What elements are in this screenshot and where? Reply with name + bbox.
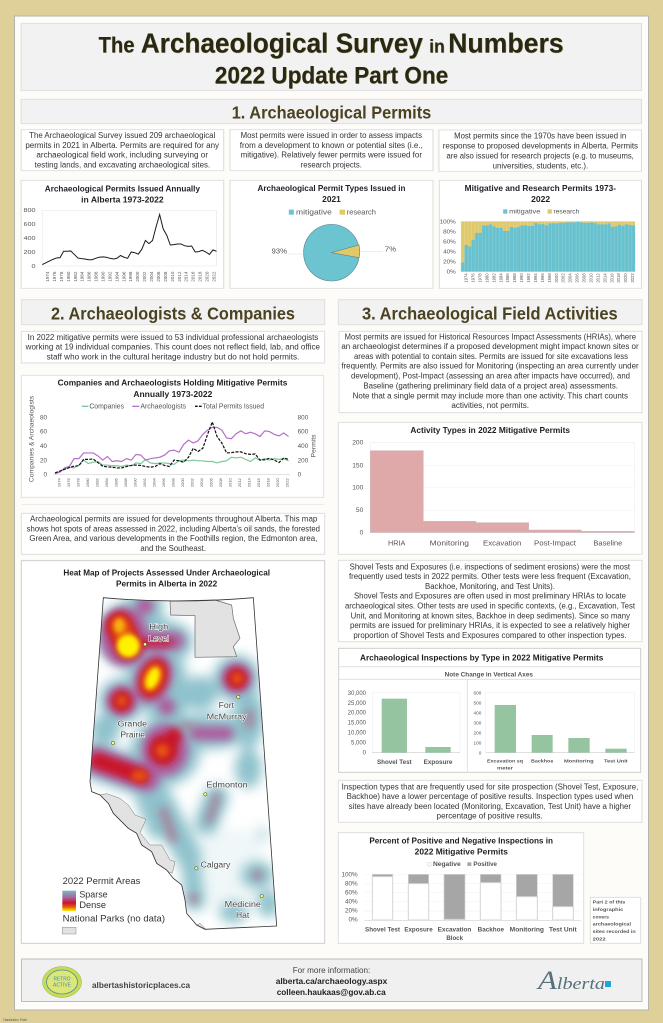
text block: inspection types: Inspection types that are frequently used for site prospection (Shovel Test, Exposure,: [342, 782, 638, 791]
stacked bar chart: positive and negative: Monitoring: [510, 927, 544, 934]
bar chart: activity types: 100: [352, 485, 364, 492]
Jasper and Banff National Parks: [100, 794, 175, 873]
line chart: permits issued annually: 1978: [59, 271, 64, 282]
city markers and labels: High: [149, 622, 169, 632]
line chart: permits issued annually: 1994: [114, 271, 119, 282]
line chart: permits issued annually: 1974: [45, 271, 50, 282]
pie chart: permit types: [230, 180, 433, 288]
title block: [21, 23, 641, 91]
bar chart: activity types: 50: [356, 507, 364, 514]
note: part 2: covers: [593, 914, 609, 920]
stacked bar chart: positive and negative: 80%: [345, 880, 358, 887]
line chart: permits issued annually: 800: [24, 208, 36, 214]
line chart: permits issued annually: 2008: [163, 271, 168, 282]
bar chart: shovel test and exposure: Exposure: [424, 760, 453, 766]
stacked bar chart: positive and negative: Exposure: [404, 927, 433, 934]
stacked bar chart: mitigative and research: 1992: [526, 273, 531, 283]
bar chart: shovel test and exposure: 30,000: [348, 691, 367, 697]
city markers and labels: Fort: [219, 700, 235, 710]
text block: shovel tests and exposures: Shovel Tests and Exposures are often used in most preliminary HRIAs to locate: [354, 592, 627, 601]
stacked bar chart: positive and negative: 60%: [345, 889, 358, 896]
stacked bar chart: mitigative and research: 1976: [470, 273, 476, 283]
stacked bar chart: mitigative and research: 2022: [531, 195, 551, 205]
icon: RetroActive logo: [42, 966, 82, 998]
stacked bar chart: mitigative and research: 2014: [602, 273, 607, 283]
note: part 2: [590, 897, 641, 943]
line chart: permits issued annually: 2012: [177, 271, 182, 282]
stacked bar chart: mitigative and research: 1990: [519, 273, 524, 283]
Alberta outline: [90, 598, 277, 929]
text block: permit purposes: mitigative). Relatively fewer permits were issued for: [241, 151, 422, 160]
stacked bar chart: mitigative and research: 60%: [443, 240, 456, 245]
line chart: companies and archaeologists: Companies: [89, 403, 124, 410]
text block: shovel tests and exposures: proportion of Shovel Tests and Exposures compared to other inspection types.: [353, 631, 627, 640]
line chart: companies and archaeologists: 0: [298, 472, 302, 479]
stacked bar chart: mitigative and research: 2018: [616, 273, 621, 283]
pie chart: permit types: Archaeological Permit Types Issued in: [258, 184, 405, 194]
stacked bar chart: positive and negative: 40%: [345, 899, 358, 906]
bar chart: shovel test and exposure: Shovel Test: [377, 760, 412, 766]
pie chart: permit types: mitigative: [296, 207, 332, 216]
stacked bar chart: mitigative and research: [439, 180, 641, 288]
section 3 area: field activities: [338, 300, 642, 554]
stacked bar chart: mitigative and research: 1998: [547, 273, 552, 283]
note: part 2: Part 2 of this: [593, 900, 626, 906]
line chart: permits issued annually: [21, 180, 224, 288]
bar chart: shovel test and exposure: 25,000: [348, 701, 367, 707]
line chart: permits issued annually: 1990: [100, 271, 106, 282]
city markers and labels: Edmonton: [206, 779, 248, 789]
line chart: companies and archaeologists: 0: [43, 472, 47, 479]
line chart: companies and archaeologists: 2006: [209, 477, 214, 487]
contact text: colleen.haukaas@gov.ab.ca: [277, 987, 386, 997]
text block: HRIA explanation: development), Post-Impact (assessing an area after impacts have occurred), and: [351, 372, 630, 381]
line chart: companies and archaeologists: 1984: [104, 477, 109, 487]
panel: inspections by type: Archaeological Inspections by Type in 2022 Mitigative Permits: [360, 653, 604, 663]
heat layers clipped to Alberta: [90, 587, 280, 923]
title line two: 2022 Update Part One: [215, 61, 448, 89]
stacked bar chart: mitigative and research: 100%: [440, 220, 456, 225]
line chart: companies and archaeologists: 1976: [66, 477, 71, 487]
classification note: Classification: Public: [3, 1018, 27, 1022]
line chart: permits issued annually: 1982: [73, 271, 78, 282]
text block: permits since 1970s: [439, 130, 641, 171]
stacked bar chart: positive and negative: 20%: [345, 908, 358, 915]
line chart: permits issued annually: 2002: [142, 271, 147, 282]
city markers and labels: Hat: [236, 910, 250, 920]
section 2 area: archaeologists and companies: [21, 300, 325, 554]
stacked bar chart: mitigative and research: 1974: [464, 273, 469, 283]
stacked bar chart: mitigative and research: 2022: [630, 273, 635, 283]
line chart: permits issued annually: Archaeological Permits Issued Annually: [45, 184, 200, 194]
bar chart: activity types: Post-Impact: [534, 540, 576, 547]
line chart: permits issued annually: 1988: [94, 271, 99, 282]
line chart: companies and archaeologists: Annually 1973-2022: [133, 389, 213, 399]
Wood Buffalo National Park: [170, 600, 240, 657]
text block: shovel tests and exposures: frequently used tests in 2022 permits. Other tests were less frequent (Excavation,: [349, 572, 631, 581]
text block: archaeologist counts: working at 19 individual companies. This count does not reflect field, lab, and office: [25, 342, 320, 352]
line chart: permits issued annually: 200: [24, 250, 36, 256]
bar chart: activity types: Monitoring: [430, 540, 469, 547]
bar chart: activity types: [338, 422, 642, 554]
map legend: [62, 876, 165, 934]
stacked bar chart: mitigative and research: 1984: [498, 273, 503, 283]
pie chart: permit types: 93%: [271, 247, 288, 255]
map title: Heat Map of Projects Assessed Under Archaeological: [63, 568, 270, 578]
line chart: companies and archaeologists: 1978: [76, 477, 81, 487]
line chart: permits issued annually: 2004: [149, 271, 154, 282]
text block: HRIA explanation: Baseline (gathering preliminary field data of a project area) assessments.: [363, 381, 618, 390]
line chart: companies and archaeologists: Total Permits Issued: [203, 403, 264, 410]
bar chart: activity types: HRIA: [388, 540, 406, 547]
bar chart: shovel test and exposure: 15,000: [348, 721, 367, 727]
bar chart: excavation, backhoe, monitoring, test unit: Test Unit: [604, 758, 628, 764]
line chart: permits issued annually: 600: [24, 222, 36, 228]
map legend: 2022 Permit Areas: [63, 876, 141, 886]
line chart: companies and archaeologists: [21, 375, 324, 497]
heading: 1. Archaeological Permits: [21, 99, 641, 124]
stacked bar chart: mitigative and research: 0%: [447, 270, 456, 275]
stacked bar chart: positive and negative: Shovel Test: [365, 927, 401, 934]
line chart: companies and archaeologists: 1986: [114, 477, 119, 487]
text block: HRIA explanation: frequently. Permits are also issued for Monitoring (inspecting an area currently under: [341, 362, 639, 371]
bar chart: excavation, backhoe, monitoring, test unit: 500: [474, 700, 482, 705]
bar chart: shovel test and exposure: [348, 691, 460, 766]
stacked bar chart: positive and negative: Percent of Positive and Negative Inspections in: [369, 835, 553, 845]
bar chart: excavation, backhoe, monitoring, test unit: Monitoring: [564, 758, 594, 764]
text block: HRIA explanation: Note that a single permit may include more than one activity. This chart counts: [353, 391, 628, 400]
text block: map description: and the Southeast.: [140, 543, 206, 553]
pie chart: permit types: research: [347, 207, 376, 216]
contact text: [276, 965, 388, 997]
panel: inspections by type: [339, 648, 641, 772]
line chart: permits issued annually: 1976: [52, 271, 57, 282]
text block: map description: [21, 513, 325, 554]
line chart: companies and archaeologists: 2002: [190, 477, 195, 487]
stacked bar chart: positive and negative: Negative: [433, 862, 461, 868]
text block: HRIA explanation: areas with potential to contain sites. Permits are issued for site excavations less: [354, 352, 628, 361]
line chart: companies and archaeologists: 1994: [152, 477, 157, 487]
line chart: companies and archaeologists: 2014: [247, 477, 252, 487]
line chart: companies and archaeologists: 2000: [180, 477, 185, 487]
line chart: permits issued annually: 0: [32, 264, 36, 270]
line chart: permits issued annually: 1992: [107, 271, 112, 282]
Waterton Lakes National Park: [197, 923, 206, 929]
heading: 3. Archaeological Field Activities: 3. Archaeological Field Activities: [362, 303, 618, 323]
stacked bar chart: mitigative and research: 1986: [505, 273, 510, 283]
text block: permits summary: testing lands, and excavating archaeological sites.: [35, 161, 210, 170]
line chart: companies and archaeologists: 1992: [142, 477, 147, 487]
text block: map description: Archaeological permits are issued for developments throughout Alberta. This map: [30, 513, 318, 523]
pie chart: permit types: 7%: [385, 244, 397, 253]
stacked bar chart: positive and negative: Backhoe: [478, 927, 504, 934]
line chart: companies and archaeologists: Companies and Archaeologists Holding Mitigative Permits: [58, 378, 287, 388]
line chart: permits issued annually: 2006: [156, 271, 161, 282]
text block: shovel tests and exposures: archaeological sites. Other tests are used in specific contexts, (e.g., Excavation, Test: [345, 602, 636, 611]
bar chart: activity types: Activity Types in 2022 Mitigative Permits: [410, 425, 570, 435]
text block: permits summary: [21, 130, 224, 171]
stacked bar chart: mitigative and research: research: [553, 208, 579, 215]
line chart: companies and archaeologists: 40: [40, 443, 47, 450]
text block: HRIA explanation: [339, 331, 642, 413]
stacked bar chart: mitigative and research: 2012: [595, 273, 600, 283]
stacked bar chart: positive and negative: 2022 Mitigative Permits: [415, 847, 508, 857]
line chart: permits issued annually: 2014: [184, 271, 189, 282]
text block: permits summary: archaeological field work, including surveying or: [36, 151, 208, 160]
line chart: companies and archaeologists: 600: [298, 429, 309, 436]
contact text: alberta.ca/archaeology.aspx: [276, 976, 388, 986]
text block: archaeologist counts: In 2022 mitigative permits were issued to 53 individual professional archaeologists: [28, 332, 318, 342]
stacked bar chart: positive and negative: Excavation: [438, 927, 471, 934]
text block: inspection types: Backhoe) have a lower percentage of positive results. Inspection types used when: [347, 792, 633, 801]
contact text: For more information:: [293, 965, 370, 975]
line chart: companies and archaeologists: 1990: [133, 477, 138, 487]
icon: RetroActive logo: RETRO: [54, 976, 71, 982]
line chart: companies and archaeologists: Companies & Archaeologists: [28, 395, 35, 482]
city markers and labels: McMurray: [207, 712, 248, 722]
city markers and labels: Calgary: [201, 859, 231, 869]
stacked bar chart: mitigative and research: 1978: [478, 273, 482, 283]
text block: inspection types: percentage of positive results.: [437, 812, 543, 821]
bar chart: excavation, backhoe, monitoring, test unit: meter: [497, 766, 513, 772]
map legend: National Parks (no data): [63, 914, 165, 924]
stacked bar chart: mitigative and research: 2004: [568, 273, 573, 283]
line chart: permits issued annually: 2000: [135, 271, 140, 282]
heading: 2. Archaeologists & Companies: 2. Archaeologists & Companies: [51, 303, 295, 323]
text block: HRIA explanation: an archaeologist determines if a proposed development might impact known sites or: [341, 342, 639, 351]
panel: heat map: [21, 561, 325, 943]
line chart: companies and archaeologists: 1980: [85, 477, 90, 487]
website text: albertashistoricplaces.ca: [92, 980, 190, 990]
line chart: companies and archaeologists: 2018: [266, 477, 271, 487]
stacked bar chart: positive and negative: Positive: [473, 862, 498, 868]
heading: 1. Archaeological Permits: 1. Archaeological Permits: [232, 103, 431, 123]
inspections area: [338, 560, 642, 822]
text block: shovel tests and exposures: [338, 560, 642, 642]
stacked bar chart: mitigative and research: 2008: [582, 273, 586, 283]
text block: inspection types: [338, 780, 642, 822]
city markers and labels: Level: [148, 634, 169, 644]
line chart: companies and archaeologists: 60: [40, 429, 47, 436]
stacked bar chart: mitigative and research: 80%: [443, 230, 456, 235]
line chart: companies and archaeologists: 1974: [57, 477, 62, 487]
city markers and labels: Prairie: [120, 730, 145, 740]
lower right area: [338, 833, 641, 943]
icon: RetroActive logo: ACTIVE: [53, 982, 71, 988]
text block: permit purposes: research projects.: [301, 161, 362, 170]
bar chart: shovel test and exposure: 20,000: [348, 711, 367, 717]
line chart: companies and archaeologists: 2012: [237, 477, 242, 487]
bar chart: activity types: Excavation: [483, 540, 521, 547]
text block: shovel tests and exposures: permits are issued for preliminary HRIAs, it is expected to see a relatively higher: [350, 621, 630, 630]
section 1 area: title and permits: [21, 23, 641, 288]
text block: map description: shows hot spots of areas assessed in 2022, including Alberta’s oil sands, the forested: [27, 523, 320, 533]
bar chart: activity types: 150: [352, 462, 364, 469]
line chart: companies and archaeologists: 1988: [123, 477, 128, 487]
text block: HRIA explanation: activities, not permits.: [451, 401, 529, 410]
bar chart: excavation, backhoe, monitoring, test unit: 300: [474, 720, 482, 725]
stacked bar chart: mitigative and research: 1980: [484, 273, 489, 283]
bar chart: excavation, backhoe, monitoring, test unit: 200: [474, 730, 482, 735]
stacked bar chart: positive and negative: 100%: [341, 871, 358, 878]
bar chart: shovel test and exposure: 10,000: [348, 731, 367, 737]
map legend: Sparse: [79, 890, 108, 900]
stacked bar chart: mitigative and research: 2016: [609, 273, 614, 283]
text block: permits since 1970s: universities, students, etc.).: [493, 161, 588, 171]
map title: Permits in Alberta in 2022: [116, 579, 218, 589]
text block: permit purposes: Most permits were issued in order to assess impacts: [241, 131, 422, 141]
bar chart: excavation, backhoe, monitoring, test unit: Backhoe: [531, 758, 554, 764]
line chart: companies and archaeologists: 80: [40, 415, 47, 422]
line chart: companies and archaeologists: 20: [40, 457, 47, 464]
line chart: permits issued annually: 1996: [121, 271, 126, 282]
text block: inspection types: sites have already been located (Monitoring, Excavation, Test Unit) have a higher: [349, 802, 631, 811]
line chart: companies and archaeologists: 1996: [161, 477, 166, 487]
stacked bar chart: positive and negative: Block: [446, 935, 463, 942]
city markers and labels: Medicine: [225, 899, 261, 909]
title line one: The: [99, 33, 134, 58]
line chart: companies and archaeologists: 400: [298, 443, 309, 450]
stacked bar chart: mitigative and research: 1996: [540, 273, 545, 283]
line chart: companies and archaeologists: 1982: [95, 477, 100, 487]
bar chart: excavation, backhoe, monitoring, test unit: 600: [474, 690, 482, 695]
icon: Alberta logo: Alberta: [536, 966, 605, 995]
stacked bar chart: positive and negative: Test Unit: [549, 927, 578, 934]
stacked bar chart: positive and negative: [338, 833, 584, 943]
stacked bar chart: mitigative and research: 1988: [512, 273, 517, 283]
stacked bar chart: mitigative and research: 1982: [491, 273, 496, 283]
bar chart: excavation, backhoe, monitoring, test unit: Excavation sq: [487, 758, 523, 764]
line chart: companies and archaeologists: 2022: [285, 477, 290, 487]
bar chart: excavation, backhoe, monitoring, test unit: [474, 690, 634, 772]
map title: [63, 568, 270, 589]
line chart: companies and archaeologists: Permits: [311, 434, 318, 457]
line chart: permits issued annually: 2020: [204, 271, 210, 282]
city markers and labels: Grande: [118, 719, 147, 729]
line chart: companies and archaeologists: 2020: [275, 477, 280, 487]
footer bar: [22, 959, 642, 1002]
line chart: permits issued annually: 2022: [212, 271, 216, 282]
text block: permit purposes: from a development to known or potential sites (i.e.,: [240, 141, 423, 151]
line chart: permits issued annually: 1986: [87, 271, 92, 282]
line chart: permits issued annually: 1998: [128, 271, 133, 282]
stacked bar chart: mitigative and research: 2000: [554, 273, 559, 283]
note: part 2: 2022: [593, 936, 606, 942]
line chart: companies and archaeologists: 1998: [171, 477, 176, 487]
text block: archaeologist counts: staff who work in the cultural heritage industry but do not hold permits.: [47, 352, 299, 362]
text block: permits summary: The Archaeological Survey issued 209 archaeological: [29, 131, 215, 141]
text block: HRIA explanation: Most permits are issued for Historical Resources Impact Assessments (HRIAs), where: [345, 332, 637, 341]
stacked bar chart: mitigative and research: mitigative: [509, 208, 540, 215]
note: part 2: sites recorded in: [593, 929, 636, 935]
bar chart: activity types: 0: [360, 529, 364, 536]
line chart: permits issued annually: 1984: [80, 271, 85, 282]
text block: archaeologist counts: [21, 331, 325, 363]
panel: inspections by type: Note Change in Vertical Axes: [445, 673, 534, 679]
text block: permit purposes: [230, 130, 433, 171]
text block: map description: Green Area, and various developments in the Foothills region, the Edmonton area,: [29, 533, 317, 543]
text block: permits summary: permits in 2021 in Alberta. Permits are required for any: [25, 141, 219, 151]
line chart: permits issued annually: 1980: [66, 271, 71, 282]
note: part 2: infographic: [593, 907, 624, 913]
text block: shovel tests and exposures: Backhoe, Monitoring, and Test Units).: [425, 582, 555, 591]
bar chart: shovel test and exposure: 5,000: [351, 740, 367, 746]
bar chart: activity types: Baseline: [593, 540, 622, 547]
line chart: permits issued annually: in Alberta 1973-2022: [81, 195, 164, 205]
bar chart: activity types: 200: [352, 440, 364, 447]
stacked bar chart: mitigative and research: 40%: [443, 250, 456, 255]
line chart: companies and archaeologists: 2016: [256, 477, 261, 487]
line chart: permits issued annually: 400: [24, 236, 36, 242]
stacked bar chart: mitigative and research: 2006: [575, 273, 580, 283]
stacked bar chart: mitigative and research: 2002: [561, 273, 566, 283]
line chart: companies and archaeologists: 2004: [199, 477, 204, 487]
stacked bar chart: mitigative and research: 2020: [623, 273, 628, 283]
map legend: Dense: [79, 900, 106, 910]
bar chart: excavation, backhoe, monitoring, test unit: 400: [474, 710, 482, 715]
line chart: companies and archaeologists: 2010: [228, 477, 233, 487]
stacked bar chart: mitigative and research: 1994: [533, 273, 538, 283]
pie chart: permit types: 2021: [322, 195, 341, 205]
bar chart: excavation, backhoe, monitoring, test unit: 100: [474, 740, 482, 745]
title line one: Archaeological Survey: [141, 27, 423, 58]
city markers and labels: [111, 622, 263, 920]
line chart: companies and archaeologists: 200: [298, 457, 309, 464]
line chart: permits issued annually: 2016: [191, 271, 196, 282]
stacked bar chart: mitigative and research: Mitigative and Research Permits 1973-: [465, 184, 616, 194]
bar chart: excavation, backhoe, monitoring, test unit: 0: [479, 750, 482, 755]
bar chart: shovel test and exposure: 0: [363, 750, 367, 756]
line chart: permits issued annually: 2010: [170, 271, 175, 282]
line chart: permits issued annually: 2018: [198, 271, 203, 282]
stacked bar chart: mitigative and research: 20%: [443, 260, 456, 265]
line chart: companies and archaeologists: Archaeologists: [140, 403, 187, 410]
title line one: Numbers: [448, 27, 564, 58]
line chart: companies and archaeologists: 2008: [218, 477, 223, 487]
line chart: companies and archaeologists: 800: [298, 415, 309, 422]
note: part 2: archaeological: [593, 922, 632, 928]
title line one: in: [429, 36, 445, 57]
stacked bar chart: mitigative and research: 2010: [588, 273, 593, 283]
text block: shovel tests and exposures: Unit, and Monitoring at known sites, Backhoe in deep sediments). Since so many: [351, 611, 630, 620]
stacked bar chart: positive and negative: 0%: [349, 917, 358, 924]
text block: shovel tests and exposures: Shovel Tests and Exposures (i.e. inspections of sediment erosions) were the most: [350, 562, 631, 571]
